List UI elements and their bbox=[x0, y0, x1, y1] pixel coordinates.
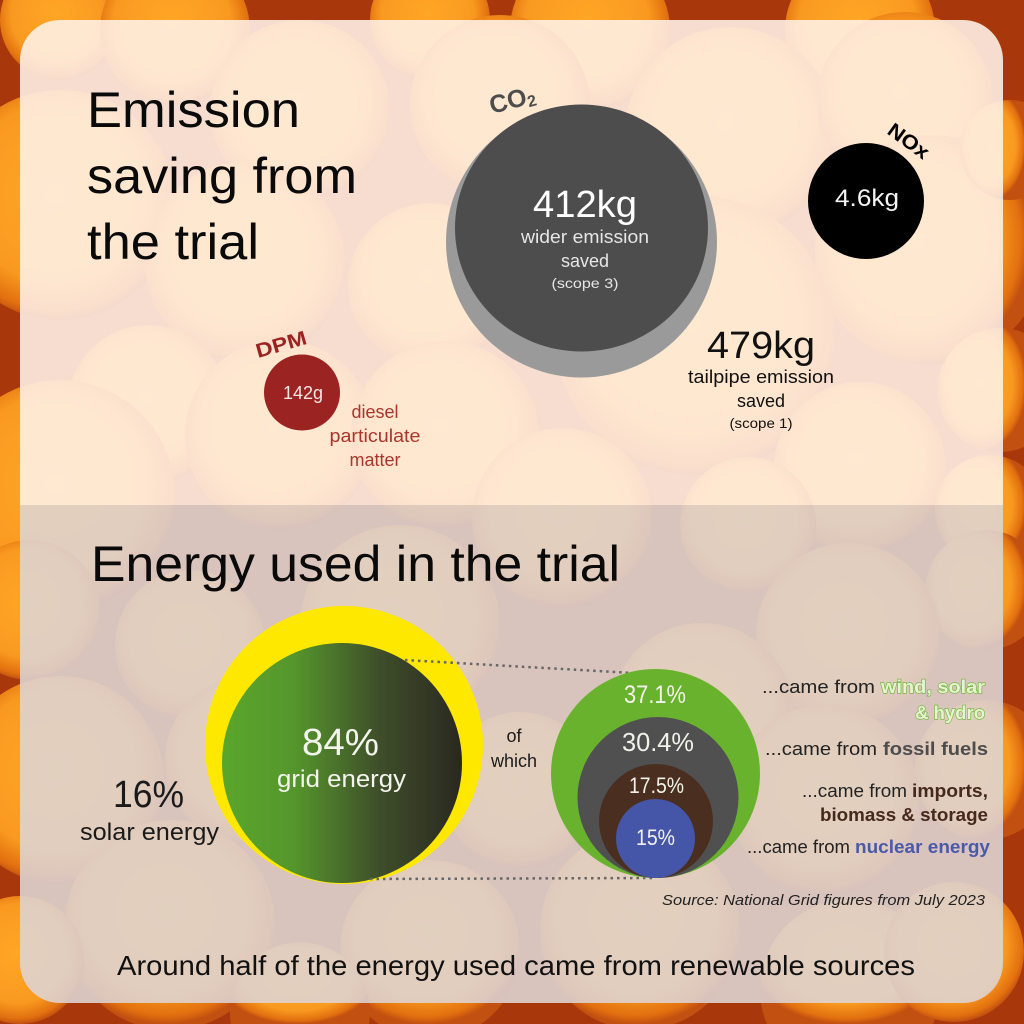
nested circles: grid mix bbox=[551, 669, 760, 878]
text: 142g: 142g bbox=[283, 383, 323, 403]
text: of which: of bbox=[506, 726, 523, 746]
circle: DPM bbox=[264, 354, 340, 430]
summary line: Around half of the energy used came from renewable sources bbox=[117, 950, 915, 981]
circle: wider CO2 bbox=[455, 104, 708, 352]
legend: wind solar hydro bbox=[762, 676, 985, 723]
text: 412kg wider emission: saved bbox=[561, 251, 609, 271]
circle: NOx bbox=[808, 143, 924, 259]
panel: emission saving background bbox=[20, 20, 1003, 505]
panel: energy used background bbox=[20, 505, 1003, 1003]
text: 479kg tailpipe emission: saved bbox=[737, 391, 785, 411]
legend: nuclear energy: ...came from bbox=[747, 836, 850, 857]
text: of which bbox=[490, 726, 537, 771]
text: 412kg wider emission bbox=[520, 184, 649, 291]
dotted connector lines bbox=[370, 660, 655, 879]
label: NOx: NOx bbox=[883, 119, 933, 164]
title: emission saving: Emission bbox=[87, 82, 300, 138]
text: 412kg wider emission: 412kg bbox=[533, 184, 637, 226]
text: 16% solar energy bbox=[80, 774, 219, 846]
legend: nuclear energy bbox=[747, 836, 991, 857]
text: percentages: 37.1% bbox=[624, 681, 686, 709]
legend: imports biomass storage bbox=[802, 780, 988, 825]
text: 412kg wider emission: (scope 3) bbox=[552, 275, 618, 291]
text: diesel particulate matter: matter bbox=[349, 450, 401, 470]
text: 16% solar energy: solar energy bbox=[80, 819, 219, 846]
label: CO2: CO bbox=[486, 83, 530, 120]
text: 84% grid energy: 84% bbox=[302, 722, 379, 764]
legend: imports biomass storage: biomass & storage bbox=[820, 804, 988, 825]
title: emission saving bbox=[87, 82, 357, 270]
title: emission saving: saving from bbox=[87, 148, 357, 204]
text: 479kg tailpipe emission: (scope 1) bbox=[730, 415, 792, 431]
legend: wind solar hydro: wind, solar bbox=[880, 676, 985, 697]
circle: grid energy bbox=[222, 643, 462, 883]
label: DPM: DPM bbox=[253, 327, 309, 363]
text: 16% solar energy: 16% bbox=[113, 774, 184, 816]
source note: Source: National Grid figures from July 2023 bbox=[662, 893, 985, 909]
text: diesel particulate matter: particulate bbox=[330, 426, 420, 446]
legend: nuclear energy: nuclear energy bbox=[855, 836, 991, 857]
legend: wind solar hydro: & hydro bbox=[915, 702, 985, 723]
text: 4.6kg: 4.6kg bbox=[835, 185, 899, 212]
legend: fossil fuels: ...came from bbox=[765, 738, 877, 759]
legend: imports biomass storage: ...came from bbox=[802, 780, 907, 801]
text: 479kg tailpipe emission: tailpipe emission bbox=[688, 367, 834, 387]
text: 412kg wider emission: wider emission bbox=[520, 227, 649, 247]
legend: wind solar hydro: ...came from bbox=[762, 676, 875, 697]
legend: imports biomass storage: imports, bbox=[912, 780, 988, 801]
text: 479kg tailpipe emission bbox=[688, 325, 834, 431]
text: percentages bbox=[622, 681, 694, 850]
text: 84% grid energy bbox=[277, 722, 406, 793]
text: percentages: 15% bbox=[636, 825, 675, 850]
text: diesel particulate matter bbox=[330, 402, 420, 470]
text: 84% grid energy: grid energy bbox=[277, 766, 406, 793]
text: 479kg tailpipe emission: 479kg bbox=[707, 325, 815, 367]
circle: tailpipe CO2 bbox=[446, 106, 717, 378]
text: percentages: 17.5% bbox=[629, 773, 684, 798]
legend: fossil fuels: fossil fuels bbox=[883, 738, 988, 759]
legend: fossil fuels bbox=[765, 738, 988, 759]
title: emission saving: the trial bbox=[87, 214, 259, 270]
circle: solar energy bbox=[205, 606, 483, 884]
text: diesel particulate matter: diesel bbox=[351, 402, 399, 422]
label: CO2: 2 bbox=[526, 92, 539, 111]
text: percentages: 30.4% bbox=[622, 727, 694, 757]
title: energy used: Energy used in the trial bbox=[91, 536, 620, 592]
text: of which: which bbox=[490, 751, 537, 771]
